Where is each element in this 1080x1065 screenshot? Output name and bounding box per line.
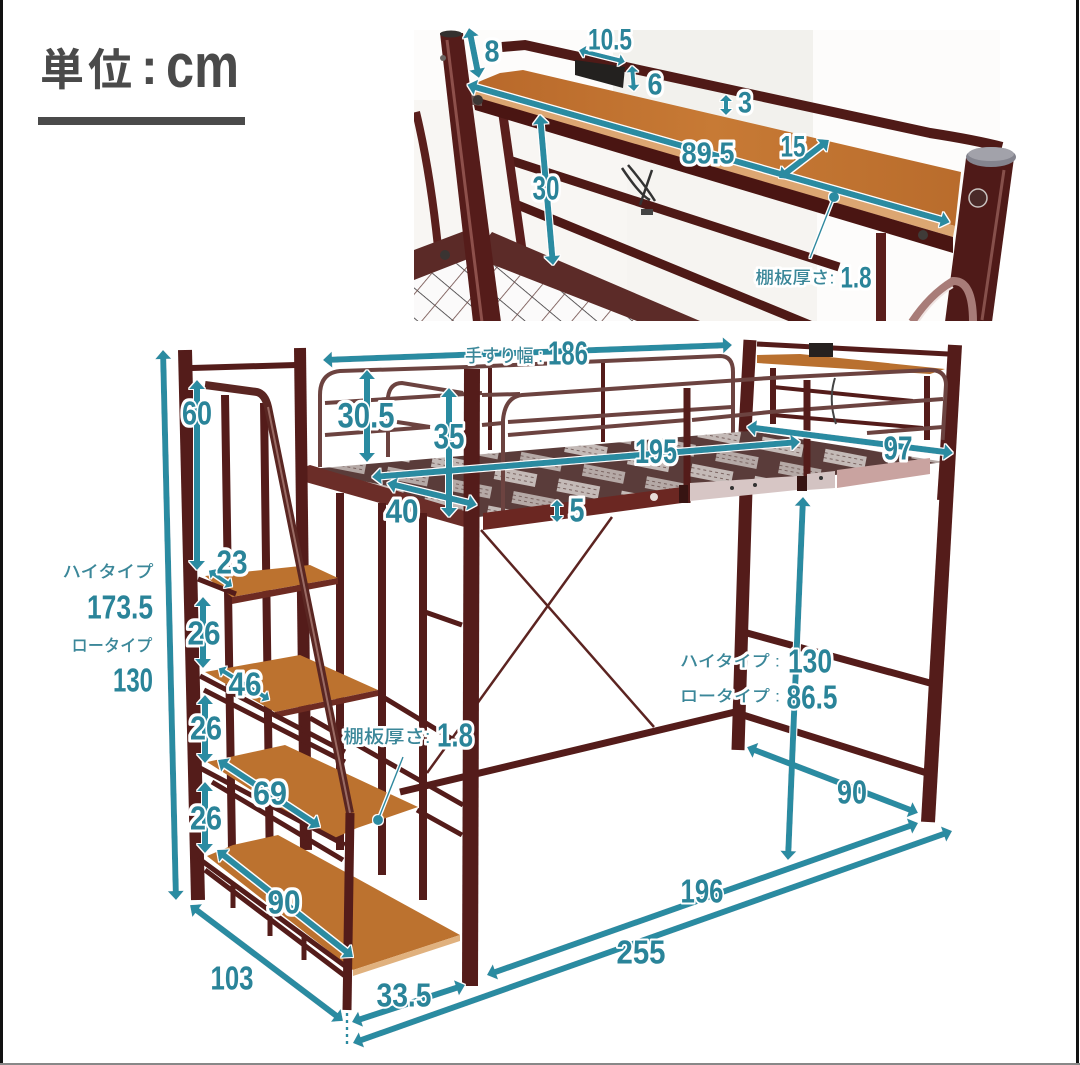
dotted corner line xyxy=(346,1013,348,1046)
head end rails and shelf xyxy=(757,343,948,440)
rear lower beam xyxy=(400,712,735,792)
deck long beam in photo xyxy=(473,232,700,321)
dim: left height labels: 130 xyxy=(113,662,153,698)
dim: overall height xyxy=(163,358,176,892)
dim: 69: 69 xyxy=(253,774,287,812)
dim: 26 upper xyxy=(188,605,220,660)
dim: stair shelf thickness xyxy=(344,716,473,825)
dim: left height labels: 173.5 xyxy=(87,588,153,626)
dim: 90 depth: 90 xyxy=(268,884,300,920)
dim: shelf thickness close-up xyxy=(756,192,872,294)
x brace xyxy=(427,517,654,773)
panel: shelf close-up photo xyxy=(414,30,1016,325)
dimension annotations xyxy=(62,24,945,1046)
outlet box xyxy=(575,60,625,88)
dim: 26 lower: 26 xyxy=(190,800,222,836)
dim: 90 depth xyxy=(223,855,347,952)
dim: shelf thickness close-up: 1.8 xyxy=(840,262,872,294)
stair handrail in photo xyxy=(912,281,973,322)
dim: handrail width 186: 手すり幅 : xyxy=(465,346,543,366)
dim: 196: 196 xyxy=(680,872,724,910)
dim: clearance height 130 and 86.5: ロータイプ : xyxy=(680,688,780,706)
title: unit cm xyxy=(38,32,245,125)
dim: 89.5: 89.5 xyxy=(682,136,734,170)
top back rail xyxy=(502,45,1002,147)
tread 2 xyxy=(200,655,378,762)
front right post xyxy=(928,345,955,822)
tread 1 xyxy=(198,565,338,604)
dim: 10.5: 10.5 xyxy=(588,24,632,56)
shelf beam xyxy=(472,96,953,253)
dim: 30.5 xyxy=(338,378,394,454)
dim: 10.5 xyxy=(584,24,632,60)
dim: 8 xyxy=(471,34,500,70)
dim: 30: 30 xyxy=(532,170,560,206)
dim: 255: 255 xyxy=(616,934,666,970)
dim: 5: 5 xyxy=(570,492,584,528)
tread 3 xyxy=(200,745,418,860)
lower rails and slat xyxy=(503,115,881,325)
tread 4 xyxy=(198,835,460,976)
dim: 89.5 xyxy=(475,87,942,220)
dim: 23: 23 xyxy=(216,544,248,580)
dim: clearance height 130 and 86.5: 86.5 xyxy=(786,678,838,716)
dim: 103 xyxy=(196,910,337,1016)
dim: 40 xyxy=(386,485,469,530)
deck left beam xyxy=(302,465,468,528)
stair second post xyxy=(300,348,306,850)
left post xyxy=(440,33,501,322)
rear guard rail xyxy=(320,356,733,467)
stair back-left post xyxy=(185,350,198,900)
dim: 33.5: 33.5 xyxy=(376,976,432,1014)
dim: 30 xyxy=(532,123,560,257)
dim: 35: 35 xyxy=(434,418,464,456)
bed frame and stairs xyxy=(185,340,955,1010)
dim: 90 width: 90 xyxy=(837,774,867,810)
dim: 40: 40 xyxy=(386,492,418,530)
dim: clearance height 130 and 86.5: ハイタイプ : xyxy=(680,652,780,670)
dim: 97: 97 xyxy=(884,430,912,466)
power cord xyxy=(622,165,655,205)
ladder rungs xyxy=(310,612,463,835)
mesh deck xyxy=(310,431,945,518)
dim: stair shelf thickness: 1.8 xyxy=(437,716,473,754)
dim: 69 xyxy=(225,764,313,823)
dim: clearance height 130 and 86.5: 130 xyxy=(788,642,832,680)
dim: 46: 46 xyxy=(228,666,262,702)
title: unit cm: 単 xyxy=(40,46,84,95)
shelf board xyxy=(467,70,961,226)
dim: 8: 8 xyxy=(484,34,500,68)
deck front beam xyxy=(483,458,930,530)
title: unit cm: 位 xyxy=(88,46,132,95)
left stair rail in photo xyxy=(416,112,438,247)
wire mesh deck in photo xyxy=(414,257,637,321)
title: unit cm: : xyxy=(141,39,158,95)
stair top bar xyxy=(192,365,296,368)
dim: 60: 60 xyxy=(182,394,212,432)
dim: 26 middle xyxy=(190,703,222,755)
dim: stair shelf thickness: 棚板厚さ: xyxy=(344,727,430,747)
dim: 35 xyxy=(434,396,464,509)
stair front post xyxy=(347,813,350,1010)
dim: 97 xyxy=(755,428,945,466)
dim: 26 lower xyxy=(190,790,222,845)
dim: handrail width 186: 186 xyxy=(548,334,588,372)
dim: 26 middle: 26 xyxy=(190,710,222,746)
deck frame beams in photo xyxy=(414,232,466,280)
right post xyxy=(945,158,1014,322)
dim: left height labels: ロータイプ xyxy=(72,636,152,656)
dim: 90 width xyxy=(754,750,910,810)
dim: 6: 6 xyxy=(648,66,662,102)
title: unit cm: cm xyxy=(166,32,239,101)
dim: clearance height 130 and 86.5 xyxy=(680,505,838,852)
dim: left height labels: ハイタイプ xyxy=(62,562,154,582)
dim: 6 xyxy=(632,66,662,102)
dim: shelf thickness close-up: 棚板厚さ: xyxy=(756,268,834,288)
dim: 15: 15 xyxy=(780,130,806,164)
foot of bed post xyxy=(940,440,944,500)
dim: 5 xyxy=(557,492,584,528)
stair verticals xyxy=(225,395,423,900)
dim: 3: 3 xyxy=(738,86,752,120)
right end lower rails xyxy=(743,633,930,773)
front tall post of bed xyxy=(470,369,472,986)
shelf bracket xyxy=(471,94,482,106)
dim: handrail width 186 xyxy=(331,334,724,372)
dim: 196 xyxy=(494,826,910,972)
dim: 26 upper: 26 xyxy=(188,614,220,652)
back right post xyxy=(738,340,750,750)
dim: 3 xyxy=(726,86,752,120)
dim: left height labels xyxy=(62,562,154,698)
dim: 33.5 xyxy=(360,976,457,1020)
dim: 103: 103 xyxy=(210,960,254,996)
front guard rail xyxy=(482,370,946,520)
stair handrail xyxy=(205,385,350,813)
dim: 195: 195 xyxy=(635,433,677,471)
dim: 15 xyxy=(780,130,823,173)
dim: 195 xyxy=(380,433,792,476)
dim: 30.5: 30.5 xyxy=(338,396,394,436)
dim: 255 xyxy=(360,834,944,1040)
